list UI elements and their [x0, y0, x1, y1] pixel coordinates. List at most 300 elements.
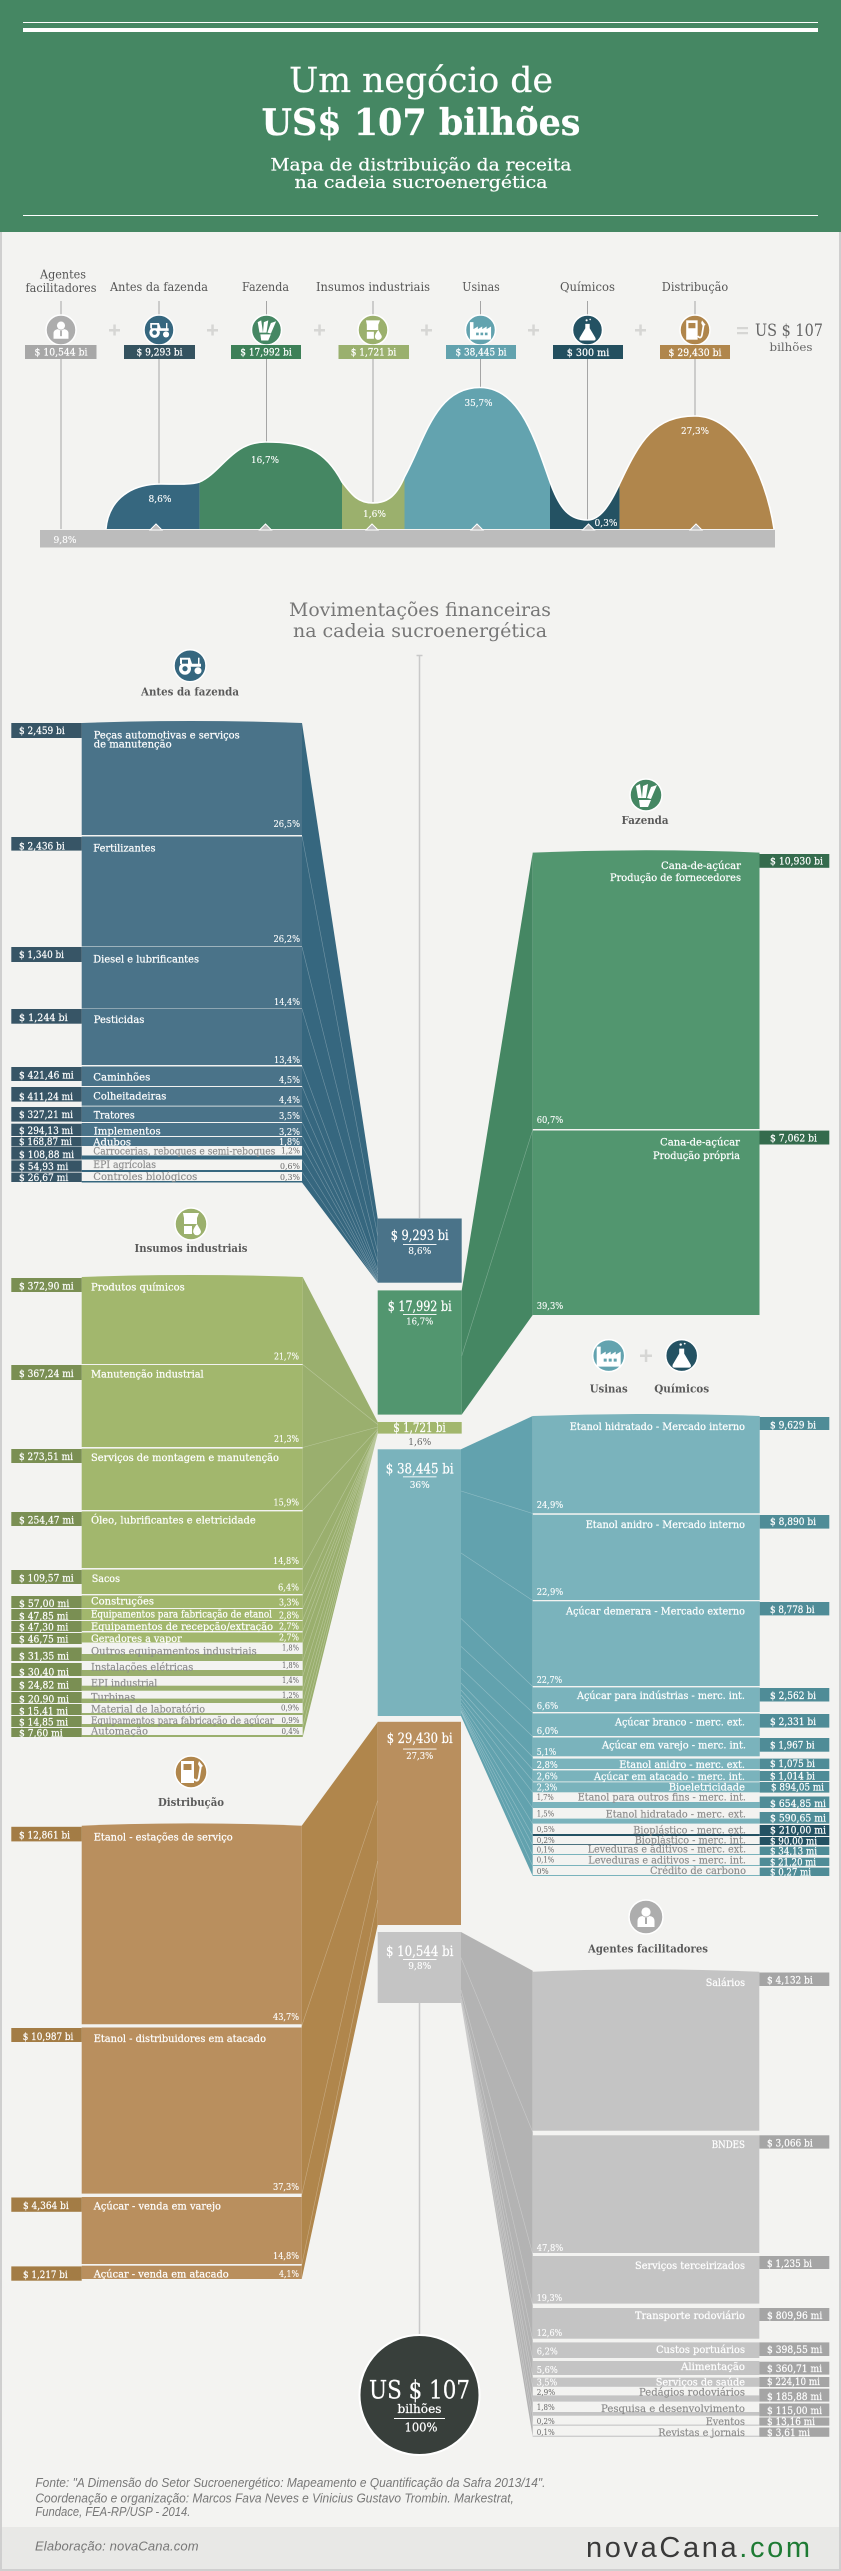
row: Peças automotivas: $ 2,459 bi [19, 725, 65, 737]
row: Salários [533, 1969, 829, 2131]
row: Pesquisa e desenvolvimento: 1,8% [537, 2403, 555, 2413]
row: Leveduras externo: $ 34,13 mi [770, 1846, 818, 1858]
row: Peças automotivas: Peças automotivas e serviços [94, 729, 240, 741]
row: Manutenção industrial: Manutenção industrial [91, 1368, 204, 1380]
row: Salários: Salários [706, 1977, 745, 1989]
summary chain: icons and values [25, 268, 823, 529]
area: Distribução [620, 416, 774, 529]
row: Etanol anidro interno [533, 1515, 829, 1600]
row: Açúcar demerara [533, 1601, 829, 1686]
percent labels: 9,8% [54, 535, 76, 546]
section title [289, 599, 551, 642]
row: Automação: $ 7,60 mi [19, 1727, 63, 1739]
row: Carrocerias: Carrocerias, reboques e semi-reboques [93, 1146, 275, 1158]
area chart: share by segment [40, 388, 775, 548]
row: Açúcar branco: $ 2,331 bi [770, 1716, 817, 1728]
central block: Insumos: $ 1,721 bi [393, 1421, 446, 1436]
row: Adubos [11, 1136, 302, 1148]
central axis [416, 655, 422, 2335]
row: Etanol hidratado externo: $ 590,65 mi [770, 1813, 827, 1825]
row: Equipamentos recepção [11, 1621, 303, 1634]
row: Caminhões: $ 421,46 mi [19, 1069, 74, 1081]
row: BNDES: BNDES [712, 2139, 745, 2151]
row: Etanol distribuidores: $ 10,987 bi [23, 2031, 74, 2043]
row: Custos portuários: Custos portuários [656, 2344, 745, 2356]
row: Automação: 0,4% [282, 1727, 300, 1737]
row: Equipamentos recepção: Equipamentos de recepção/extração [91, 1621, 273, 1633]
row: Etanol para outros fins: 1,7% [537, 1793, 554, 1803]
row: Equipamentos etanol: 2,8% [279, 1611, 299, 1622]
percent labels: 1,6% [363, 509, 386, 520]
row: Revistas e jornais: 0,1% [537, 2428, 555, 2438]
row: Pesticidas: Pesticidas [94, 1014, 144, 1026]
row: Bioeletricidade: $ 894,05 mi [771, 1782, 825, 1794]
row: Equipamentos etanol [11, 1608, 303, 1623]
central block: Agentes: $ 10,544 bi [386, 1944, 454, 1960]
row: Cana-de-açúcar própria: $ 7,062 bi [770, 1132, 818, 1144]
row: Sacos [11, 1570, 303, 1594]
row: Manutenção industrial [11, 1365, 303, 1447]
row: Geradores a vapor: 2,7% [279, 1633, 299, 1644]
row: Sacos: $ 109,57 mi [19, 1572, 74, 1584]
row: Etanol distribuidores: Etanol - distribuidores em atacado [94, 2033, 266, 2045]
row: Diesel e lubrificantes [11, 947, 302, 1009]
row: Açúcar para indústrias [533, 1687, 829, 1712]
row: Transporte rodoviário: Transporte rodoviário [635, 2310, 745, 2322]
icon: fuel pump [175, 1756, 207, 1788]
row: Instalações elétricas: $ 30,40 mi [19, 1667, 70, 1679]
row: Controles biológicos: 0,3% [280, 1173, 300, 1183]
total circle [360, 2335, 480, 2455]
title: US$ 107 bilhões [262, 102, 580, 144]
row: Colheitadeiras: 4,4% [279, 1095, 300, 1106]
total: US $ 107 [755, 321, 823, 341]
row: Eventos: $ 13,16 mi [767, 2416, 816, 2428]
row: Açúcar demerara: 22,7% [537, 1675, 562, 1686]
row: Construções: $ 57,00 mi [19, 1598, 70, 1610]
row: Pedágios rodoviários: $ 185,88 mi [767, 2391, 823, 2403]
row: Diesel e lubrificantes: Diesel e lubrificantes [93, 953, 199, 965]
percent labels: 35,7% [464, 398, 492, 409]
footer bar [0, 2527, 841, 2571]
row: Peças automotivas [11, 721, 302, 835]
section title: Movimentações financeiras [289, 599, 551, 621]
row: Bioplástico externo [533, 1825, 829, 1837]
row: Açúcar varejo: Açúcar - venda em varejo [93, 2201, 221, 2213]
heading: Insumos industriais [134, 1241, 248, 1255]
row: Fertilizantes [11, 836, 302, 946]
panel: Distribução [11, 1722, 378, 2281]
base bar [40, 530, 775, 548]
central block: Usinas e Químicos: 36% [410, 1480, 430, 1491]
row: Material de laboratório: 0,9% [281, 1704, 299, 1714]
panel: Fazenda [462, 779, 829, 1415]
percent labels: 27,3% [681, 426, 709, 437]
item: Antes da fazenda: Antes da fazenda [109, 280, 208, 294]
source note: Coordenação e organização: Marcos Fava Neves e Vinicius Gustavo Trombin. Markestrat, [35, 2491, 514, 2506]
item: Químicos [553, 280, 623, 359]
row: Etanol hidratado externo: Etanol hidratado - merc. ext. [606, 1808, 746, 1820]
row: Custos portuários [533, 2342, 829, 2358]
row: Fertilizantes: 26,2% [274, 934, 300, 945]
row: Açúcar atacado: 4,1% [279, 2269, 299, 2280]
row: Açúcar para indústrias: $ 2,562 bi [770, 1690, 817, 1702]
row: Tratores: 3,5% [279, 1111, 300, 1122]
row: Serviços de montagem: Serviços de montagem e manutenção [91, 1452, 279, 1464]
row: Crédito de carbono [533, 1865, 829, 1879]
row: Equipamentos etanol: $ 47,85 mi [19, 1611, 69, 1623]
row: Óleo, lubrificantes [11, 1511, 303, 1568]
row: Implementos: 3,2% [279, 1127, 300, 1138]
heading: Agentes facilitadores [587, 1942, 708, 1956]
central block: Antes da fazenda [378, 1218, 462, 1283]
item: Fazenda: $ 17,992 bi [240, 346, 292, 358]
row: Óleo, lubrificantes: $ 254,47 mi [19, 1515, 75, 1527]
row: Outros equipamentos: 1,8% [282, 1643, 299, 1653]
row: Pesticidas: $ 1,244 bi [19, 1012, 68, 1024]
item: Usinas: $ 38,445 bi [456, 346, 507, 358]
row: Bioeletricidade: Bioeletricidade [669, 1782, 745, 1794]
item: Insumos industriais: Insumos industriais [316, 280, 430, 294]
central block: Insumos [378, 1421, 462, 1448]
row: Etanol estações: $ 12,861 bi [19, 1830, 71, 1842]
row: Pedágios rodoviários: 2,9% [537, 2388, 555, 2398]
row: Colheitadeiras: $ 411,24 mi [19, 1091, 74, 1103]
row: Material de laboratório: Material de laboratório [91, 1704, 205, 1716]
icon: flask [666, 1340, 698, 1372]
row: BNDES: 47,8% [537, 2243, 563, 2254]
row: Leveduras interno: Leveduras e aditivos - merc. int. [588, 1854, 746, 1866]
row: Etanol hidratado externo [533, 1808, 829, 1825]
row: Leveduras externo: 0,1% [537, 1846, 554, 1856]
row: Etanol hidratado interno [533, 1414, 829, 1513]
row: Diesel e lubrificantes: 14,4% [274, 997, 300, 1008]
percent labels [54, 398, 709, 546]
panel: Insumos industriais [11, 1208, 378, 1739]
row: Material de laboratório [11, 1704, 303, 1718]
row: Açúcar em varejo: $ 1,967 bi [770, 1740, 815, 1752]
central block: Distribução [378, 1722, 461, 1925]
row: Tratores [11, 1106, 302, 1122]
row: Equipamentos açúcar: $ 14,85 mi [19, 1717, 69, 1729]
funnel [302, 1722, 378, 2279]
row: Açúcar atacado [11, 2266, 302, 2281]
row: Turbinas: 1,2% [282, 1691, 299, 1701]
funnel [462, 853, 533, 1415]
row: Leveduras externo: Leveduras e aditivos - merc. ext. [588, 1844, 746, 1856]
row: Crédito de carbono: $ 0,27 mi [770, 1867, 812, 1879]
row: Etanol distribuidores: 37,3% [273, 2182, 299, 2193]
central block: Antes da fazenda: $ 9,293 bi [391, 1228, 449, 1244]
row: Geradores a vapor [11, 1632, 303, 1646]
row: Pesquisa e desenvolvimento: $ 115,00 mi [767, 2405, 823, 2417]
row: Bioplástico interno: 0,2% [537, 1836, 555, 1846]
row: Carrocerias: $ 108,88 mi [19, 1149, 75, 1161]
row: Etanol anidro interno: Etanol anidro - Mercado interno [586, 1519, 745, 1531]
row: Transporte rodoviário: 12,6% [537, 2328, 562, 2339]
row: Equipamentos recepção: 2,7% [279, 1622, 299, 1633]
row: Açúcar atacado: $ 1,217 bi [23, 2269, 68, 2281]
row: Bioeletricidade: 2,3% [537, 1782, 557, 1793]
row: Óleo, lubrificantes: Óleo, lubrificantes e eletricidade [91, 1513, 256, 1527]
area: Insumos [342, 477, 404, 529]
row: Etanol estações: Etanol - estações de serviço [94, 1832, 233, 1844]
row: Eventos: Eventos [706, 2416, 745, 2428]
row: Bioplástico externo: 0,5% [537, 1825, 555, 1835]
row: Etanol para outros fins: Etanol para outros fins - merc. int. [578, 1792, 746, 1804]
central block: Fazenda: 16,7% [406, 1317, 433, 1328]
row: Açúcar em varejo: Açúcar em varejo - merc. int. [601, 1740, 746, 1752]
item: Distribução [660, 280, 730, 359]
row: Sacos: 6,4% [278, 1583, 299, 1594]
row: Leveduras externo [533, 1844, 829, 1858]
row: Pesquisa e desenvolvimento [533, 2403, 829, 2417]
source note [35, 2475, 545, 2519]
row: Açúcar em atacado: Açúcar em atacado - merc. int. [593, 1771, 745, 1783]
subtitle [270, 156, 572, 193]
subtitle: na cadeia sucroenergética [294, 173, 548, 193]
row: Etanol hidratado interno: Etanol hidratado - Mercado interno [570, 1421, 745, 1433]
row: Açúcar branco: 6,0% [537, 1726, 558, 1737]
funnel [461, 1416, 533, 1876]
heading: Fazenda [622, 813, 669, 827]
percent labels: 0,3% [594, 518, 618, 529]
row: Bioplástico interno: Bioplástico - merc. int. [635, 1834, 746, 1846]
row: Produtos químicos: 21,7% [274, 1352, 299, 1363]
row: Controles biológicos: $ 26,67 mi [19, 1172, 69, 1184]
row: Caminhões [11, 1066, 302, 1086]
item: Insumos industriais [316, 280, 430, 359]
row: Sacos: Sacos [92, 1573, 120, 1585]
row: Etanol anidro interno: 22,9% [537, 1587, 563, 1598]
central block: Agentes [378, 1932, 461, 2003]
row: Leveduras interno: 0,1% [537, 1856, 554, 1866]
central block: Usinas e Químicos [378, 1449, 461, 1716]
item: Agentes facilitadores: Agentes [39, 268, 86, 282]
row: Cana-de-açúcar fornecedores: Produção de fornecedores [610, 872, 741, 884]
row: Revistas e jornais: $ 3,61 mi [767, 2427, 811, 2439]
row: Equipamentos açúcar: 0,9% [282, 1716, 300, 1726]
total: bilhões [770, 340, 813, 354]
item: Antes da fazenda [109, 280, 208, 359]
item: Agentes facilitadores: $ 10,544 bi [34, 346, 88, 358]
row: Etanol anidro externo: Etanol anidro - merc. ext. [619, 1759, 745, 1771]
panel: Agentes facilitadores [461, 1900, 829, 2439]
row: Serviços de montagem: $ 273,51 mi [19, 1451, 74, 1463]
row: Implementos: Implementos [94, 1125, 161, 1137]
row: Crédito de carbono: Crédito de carbono [650, 1865, 746, 1877]
panel: Usinas e Químicos [461, 1340, 829, 1879]
row: Bioplástico externo: $ 210,00 mi [770, 1825, 827, 1837]
row: EPI agrícolas: EPI agrícolas [93, 1159, 156, 1171]
row: Equipamentos açúcar: Equipamentos para fabricação de açúcar [91, 1715, 275, 1727]
item: Distribução: $ 29,430 bi [668, 347, 722, 359]
source note: Fundace, FEA-RP/USP - 2014. [35, 2504, 190, 2519]
row: Turbinas: Turbinas [91, 1692, 135, 1704]
subtitle: Mapa de distribuição da receita [270, 156, 572, 176]
central block: Antes da fazenda: 8,6% [408, 1246, 431, 1257]
row: Açúcar atacado: Açúcar - venda em atacado [93, 2268, 229, 2280]
row: Caminhões: 4,5% [279, 1075, 300, 1086]
row: Cana-de-açúcar própria: Cana-de-açúcar [660, 1137, 741, 1149]
row: EPI industrial [11, 1676, 303, 1692]
central block: Agentes: 9,8% [408, 1961, 431, 1972]
row: Bioplástico externo: Bioplástico - merc. ext. [633, 1825, 746, 1837]
row: Açúcar em varejo: 5,1% [537, 1747, 556, 1758]
row: Açúcar varejo: $ 4,364 bi [23, 2200, 69, 2212]
row: Controles biológicos [11, 1171, 302, 1184]
row: Colheitadeiras: Colheitadeiras [93, 1091, 166, 1103]
row: Instalações elétricas [11, 1661, 303, 1679]
row: Serviços terceirizados: 19,3% [537, 2293, 562, 2304]
title: Um negócio de [289, 61, 553, 101]
item: Distribução: Distribução [662, 280, 728, 294]
source note: Fonte: "A Dimensão do Setor Sucroenergético: Mapeamento e Quantificação da Safra 2013/14". [35, 2475, 545, 2490]
row: Cana-de-açúcar própria: 39,3% [537, 1301, 563, 1312]
panel: Antes da fazenda [11, 650, 378, 1283]
row: Açúcar em varejo [533, 1738, 829, 1758]
row: Adubos: 1,8% [279, 1137, 300, 1148]
row: Serviços de montagem: 15,9% [274, 1498, 299, 1509]
row: Equipamentos recepção: $ 47,30 mi [19, 1622, 69, 1634]
row: Alimentação: Alimentação [680, 2361, 745, 2373]
row: Etanol anidro externo [533, 1758, 829, 1771]
row: Tratores: $ 327,21 mi [19, 1109, 74, 1121]
row: Açúcar em atacado [533, 1770, 829, 1783]
row: Salários: $ 4,132 bi [767, 1975, 813, 1987]
row: Eventos: 0,2% [537, 2417, 555, 2427]
row: Construções: Construções [91, 1596, 154, 1608]
row: Carrocerias [11, 1146, 302, 1161]
row: Açúcar para indústrias: Açúcar para indústrias - merc. int. [576, 1690, 745, 1702]
connector lines [61, 301, 695, 529]
row: Leveduras interno: $ 21,20 mi [770, 1856, 817, 1868]
central block: Distribução: $ 29,430 bi [387, 1731, 453, 1747]
row: Custos portuários: $ 398,55 mi [767, 2344, 823, 2356]
row: Colheitadeiras [11, 1087, 302, 1106]
heading: Químicos: Químicos [654, 1382, 709, 1396]
curve outline [106, 388, 774, 529]
row: Serviços de montagem [11, 1449, 303, 1510]
item: Usinas: Usinas [462, 280, 500, 294]
row: Instalações elétricas: Instalações elétricas [91, 1662, 193, 1674]
row: Adubos: $ 168,87 mi [19, 1136, 73, 1148]
row: Serviços terceirizados: $ 1,235 bi [767, 2258, 813, 2270]
row: Óleo, lubrificantes: 14,8% [273, 1556, 299, 1567]
row: Controles biológicos: Controles biológicos [93, 1171, 197, 1183]
row: Alimentação: 5,6% [537, 2365, 558, 2376]
item: Químicos: Químicos [560, 280, 615, 294]
row: Etanol distribuidores [11, 2028, 302, 2194]
area: Químicos [550, 482, 620, 529]
row: Produtos químicos [11, 1275, 303, 1364]
row: Eventos [533, 2416, 829, 2428]
row: Crédito de carbono: 0% [537, 1867, 549, 1877]
item: Agentes facilitadores: facilitadores [26, 281, 96, 295]
row: EPI agrícolas [11, 1159, 302, 1173]
row: Diesel e lubrificantes: $ 1,340 bi [19, 949, 65, 961]
row: Turbinas [11, 1691, 303, 1706]
row: Outros equipamentos [11, 1643, 303, 1663]
row: Produtos químicos: $ 372,90 mi [19, 1281, 74, 1293]
item: Fazenda [231, 280, 301, 359]
row: Adubos: Adubos [92, 1136, 131, 1148]
row: EPI agrícolas: 0,6% [280, 1162, 300, 1172]
row: Açúcar para indústrias: 6,6% [537, 1701, 558, 1712]
row: EPI industrial: EPI industrial [91, 1677, 158, 1689]
row: Bioplástico interno: $ 90,00 mi [770, 1836, 818, 1848]
row: Serviços terceirizados: Serviços terceirizados [635, 2260, 745, 2272]
row: Açúcar branco: Açúcar branco - merc. ext. [614, 1717, 745, 1729]
row: Serviços de saúde: Serviços de saúde [656, 2377, 745, 2389]
row: Produtos químicos: Produtos químicos [91, 1282, 185, 1294]
row: Outros equipamentos: Outros equipamentos industriais [91, 1646, 257, 1658]
row: BNDES: $ 3,066 bi [767, 2138, 813, 2150]
row: Etanol estações: 43,7% [273, 2012, 299, 2023]
funnel [303, 1277, 378, 1737]
row: BNDES [533, 2135, 829, 2254]
row: Turbinas: $ 20,90 mi [19, 1694, 70, 1706]
icon: sugarcane [630, 779, 662, 811]
row: Etanol estações [11, 1823, 302, 2024]
item: Fazenda: Fazenda [242, 280, 289, 294]
row: Cana-de-açúcar fornecedores: $ 10,930 bi [770, 856, 824, 868]
row: Açúcar demerara: $ 8,778 bi [770, 1604, 815, 1616]
row: Material de laboratório: $ 15,41 mi [19, 1706, 69, 1718]
row: Manutenção industrial: $ 367,24 mi [19, 1368, 74, 1380]
row: Açúcar em atacado: $ 1,014 bi [770, 1771, 816, 1783]
row: Cana-de-açúcar própria: Produção própria [653, 1150, 740, 1162]
icon: person [629, 1900, 663, 1934]
row: Serviços de saúde [533, 2376, 829, 2389]
logo: novaCana.com [586, 2532, 810, 2564]
row: Alimentação: $ 360,71 mi [767, 2363, 823, 2375]
row: Implementos: $ 294,13 mi [19, 1125, 74, 1137]
row: Serviços de saúde: $ 224,10 mi [767, 2376, 821, 2388]
row: Leveduras interno [533, 1854, 829, 1868]
row: Transporte rodoviário [533, 2308, 829, 2339]
row: Tratores: Tratores [94, 1109, 135, 1121]
row: Açúcar demerara: Açúcar demerara - Mercado externo [565, 1606, 745, 1618]
row: Construções [11, 1595, 303, 1610]
central block: Fazenda: $ 17,992 bi [388, 1299, 452, 1315]
section title: na cadeia sucroenergética [293, 620, 547, 642]
funnel [302, 723, 378, 1283]
icon: factory [593, 1340, 625, 1372]
icon: tractor [174, 650, 206, 682]
row: Etanol hidratado externo: 1,5% [537, 1810, 554, 1820]
row: Carrocerias: 1,2% [281, 1146, 300, 1156]
row: Serviços terceirizados [533, 2256, 829, 2304]
item: Químicos: $ 300 mi [567, 347, 610, 359]
row: Açúcar varejo: 14,8% [273, 2251, 299, 2262]
row: Cana-de-açúcar fornecedores: Cana-de-açúcar [661, 860, 742, 872]
row: Revistas e jornais: Revistas e jornais [658, 2427, 745, 2439]
total circle: US $ 107 [369, 2375, 470, 2404]
credit: Elaboração: novaCana.com [35, 2539, 199, 2554]
row: Etanol anidro externo: 2,8% [537, 1760, 558, 1771]
row: Caminhões: Caminhões [93, 1071, 150, 1083]
row: Custos portuários: 6,2% [537, 2347, 558, 2358]
area: Fazenda [200, 442, 342, 529]
percent labels: 8,6% [148, 494, 172, 505]
area: Antes da fazenda [106, 482, 200, 529]
row: Cana-de-açúcar fornecedores: 60,7% [537, 1115, 563, 1126]
row: Implementos [11, 1123, 302, 1138]
icon: drums [175, 1208, 207, 1240]
row: Etanol hidratado interno: 24,9% [537, 1500, 563, 1511]
row: EPI industrial: 1,4% [282, 1676, 299, 1686]
